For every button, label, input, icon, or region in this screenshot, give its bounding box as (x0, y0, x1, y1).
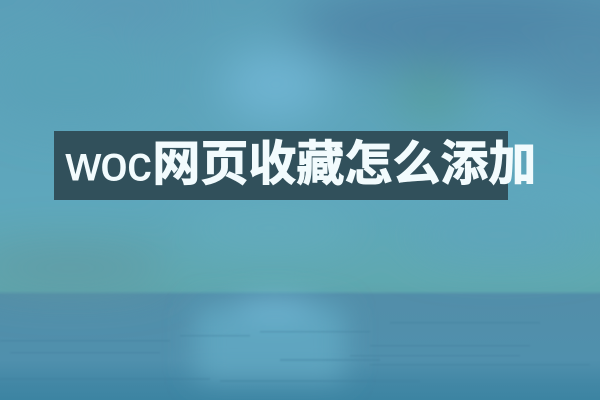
clouds (0, 0, 600, 283)
sea glow (195, 299, 345, 380)
title banner (54, 131, 508, 200)
title text: woc网页收藏怎么添加 (66, 124, 536, 194)
